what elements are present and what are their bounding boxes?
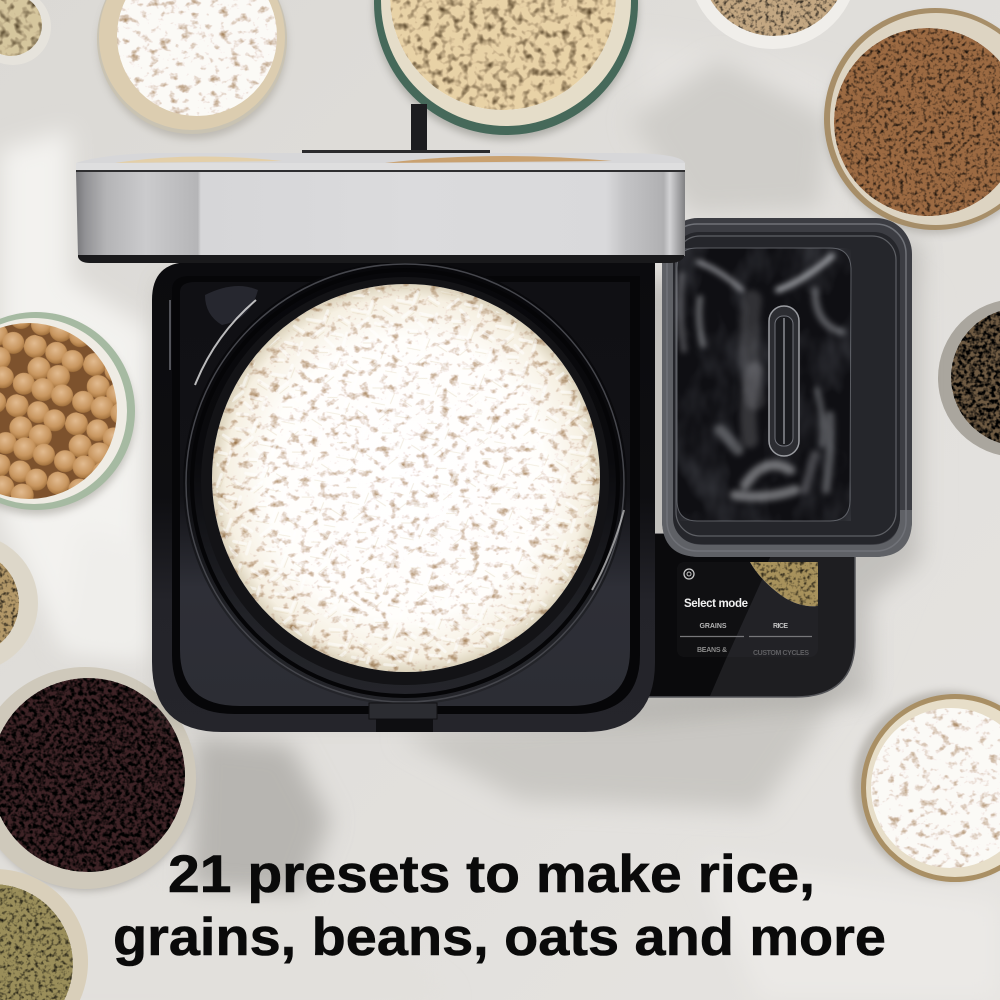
steel lid [76,150,685,263]
bowl: farro [824,8,1000,234]
bowl: white rice top [97,0,287,139]
power cord [411,104,427,156]
bowl: short grain rice [853,691,1000,882]
inner pot [183,261,627,705]
headline: grains, beans, oats and more [113,908,886,967]
headline [113,845,886,967]
mode: beans: BEANS & [697,647,727,654]
inner dark cavity [677,248,851,521]
bowl: rolled oats with green rim [374,0,638,140]
glass steam lid [662,218,912,557]
bowl: seeds left edge [0,534,38,672]
cooked white rice [212,284,600,672]
rim light streaks [195,300,256,385]
touch screen display [677,562,818,657]
divider lines [680,636,812,638]
bowl: green lentils [0,869,88,1000]
cooker shadow [160,240,920,720]
mode: custom cycles: CUSTOM CYCLES [753,650,809,657]
mode: grains: GRAINS [700,623,727,630]
headline: 21 presets to make rice, [168,845,815,904]
lid hinge clasp [369,703,437,732]
bowl: black rice [0,667,196,891]
screen heading: Select mode [684,598,748,610]
recessed dish with corner highlights [180,282,630,706]
settings icon [684,569,694,579]
glass handle [769,306,799,456]
grain photo on screen [750,562,818,606]
bowl: mixed grains top right [688,0,858,49]
steam swirls [677,248,851,521]
control panel [630,534,855,697]
mode: rice: RICE [773,623,788,630]
bowl: chickpeas [0,312,135,515]
cooker body [152,261,655,732]
bowl: chickpeas top left [0,0,51,65]
lid top reflections [115,156,282,163]
bowl: quinoa [938,299,1000,457]
